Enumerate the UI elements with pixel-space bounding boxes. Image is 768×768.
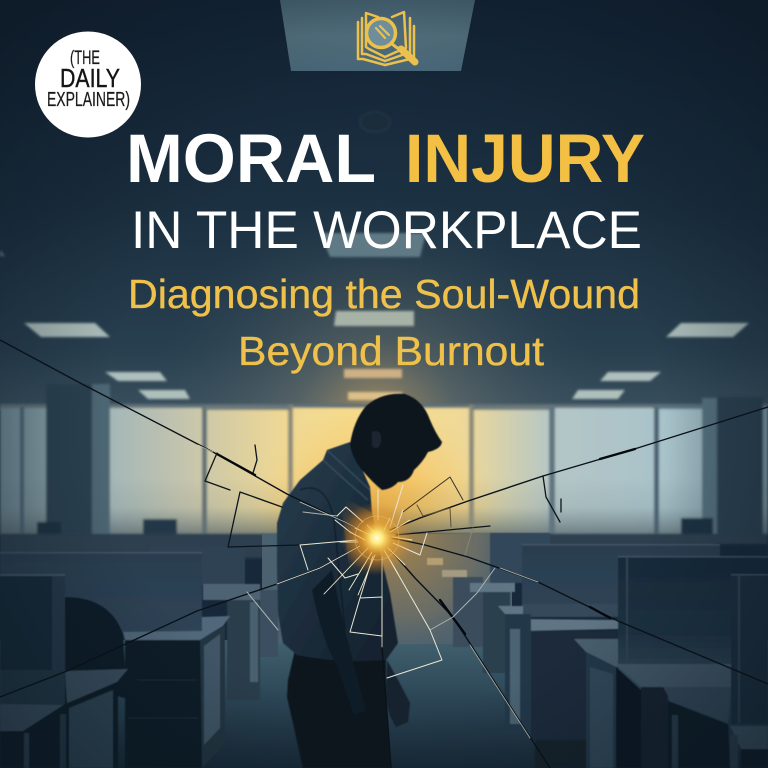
- left back desk: [227, 600, 260, 700]
- distant monitors: [37, 522, 61, 536]
- badge line 3: EXPLAINER): [47, 89, 130, 111]
- right main panel: [522, 544, 720, 617]
- forearm sleeve: [312, 570, 366, 715]
- magnifying glass: [366, 18, 415, 62]
- right cubicles: [427, 533, 768, 768]
- title: moral: MORAL: [126, 120, 376, 197]
- main crack lines: [0, 340, 768, 768]
- book: [358, 12, 414, 65]
- ceiling lights: [0, 233, 749, 400]
- chair: [65, 597, 148, 768]
- windows band: [0, 384, 768, 537]
- white crack highlights: [198, 445, 538, 738]
- head: [350, 394, 442, 490]
- floor: [0, 640, 768, 768]
- sleeve folds: [300, 450, 370, 630]
- ear: [372, 431, 381, 448]
- centre far desks: [427, 558, 443, 565]
- ceiling: [0, 0, 768, 410]
- badge line 2: DAILY: [60, 63, 120, 93]
- burst rays: [324, 518, 412, 595]
- ceiling warm glow: [100, 190, 660, 410]
- tagline line 1: Diagnosing the Soul-Wound: [128, 271, 640, 317]
- badge: The Daily Explainer: [35, 32, 141, 138]
- drawer lines: [128, 680, 198, 718]
- chest glow: [340, 495, 385, 575]
- desk floor shadow: [535, 740, 590, 768]
- right second desk: [574, 639, 618, 667]
- badge line 1: (THE: [70, 48, 100, 69]
- trousers: [287, 650, 391, 768]
- glass shard outlines: [205, 445, 561, 547]
- left main panel: [0, 552, 202, 632]
- subtitle: in the workplace: IN THE WORKPLACE: [131, 201, 642, 260]
- shattered glass cracks: [0, 340, 768, 768]
- right third desk: [663, 687, 731, 724]
- thick crack sections: [217, 449, 635, 634]
- burst ring: [355, 516, 399, 560]
- left main desk: [123, 616, 230, 640]
- bright shard outlines: [247, 477, 495, 678]
- shirt: [277, 442, 398, 661]
- right third panel: [731, 574, 768, 724]
- title: [126, 120, 645, 197]
- title: injury: INJURY: [405, 120, 645, 197]
- left foreground panel: [0, 574, 65, 705]
- right far panel: [490, 533, 550, 583]
- impact glow: [341, 502, 413, 574]
- right main desk: [498, 606, 618, 631]
- centre warm zone behind figure: [262, 534, 512, 644]
- logo: open book with magnifying glass: [358, 12, 415, 65]
- left pillar: [46, 384, 92, 536]
- window frames: [20, 405, 702, 535]
- right second panel: [618, 556, 768, 664]
- skylight panel: [280, 0, 475, 71]
- right pillar: [702, 398, 717, 536]
- hand: [386, 660, 410, 727]
- left back panel: [150, 547, 245, 585]
- left foreground desk: [65, 669, 128, 704]
- tagline line 2: Beyond Burnout: [238, 328, 545, 374]
- left cubicles: [0, 547, 278, 768]
- smoke detector: [360, 112, 390, 132]
- far cubicle row: [0, 534, 768, 558]
- man silhouette: [277, 394, 442, 768]
